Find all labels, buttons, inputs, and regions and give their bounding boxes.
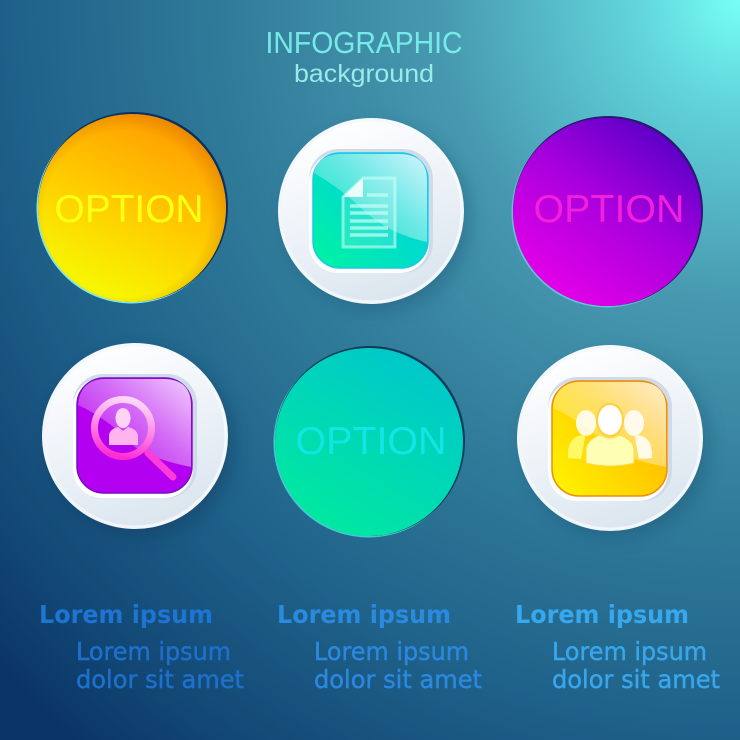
text block: column 3 xyxy=(515,600,720,694)
icon tile: purple xyxy=(77,378,192,493)
icon: people group xyxy=(568,404,652,466)
label: option: OPTION xyxy=(534,188,684,231)
body: Lorem ipsum xyxy=(314,637,469,666)
heading: Lorem ipsum xyxy=(515,600,689,629)
panel: document button xyxy=(278,118,470,310)
panel: purple option circle xyxy=(512,116,703,308)
panel: people button xyxy=(517,345,709,537)
subtitle: background: background xyxy=(294,60,434,88)
icon tile: teal xyxy=(313,153,428,268)
body: dolor sit amet xyxy=(314,665,482,694)
label: option: OPTION xyxy=(54,188,204,231)
label: option: OPTION xyxy=(296,420,446,463)
icon tile: yellow xyxy=(552,381,667,496)
panel: orange option circle xyxy=(36,112,228,304)
title: infographic: INFOGRAPHIC xyxy=(266,25,462,60)
icon: magnifier with person xyxy=(94,400,173,477)
title xyxy=(266,25,462,88)
icon: document xyxy=(343,178,395,247)
text block: column 2 xyxy=(277,600,482,694)
heading: Lorem ipsum xyxy=(39,600,213,629)
body: dolor sit amet xyxy=(76,665,244,694)
panel: search person button xyxy=(42,343,234,535)
text block: column 1 xyxy=(39,600,244,694)
body: dolor sit amet xyxy=(552,665,720,694)
heading: Lorem ipsum xyxy=(277,600,451,629)
body: Lorem ipsum xyxy=(76,637,231,666)
body: Lorem ipsum xyxy=(552,637,707,666)
panel: teal option circle xyxy=(274,346,465,538)
